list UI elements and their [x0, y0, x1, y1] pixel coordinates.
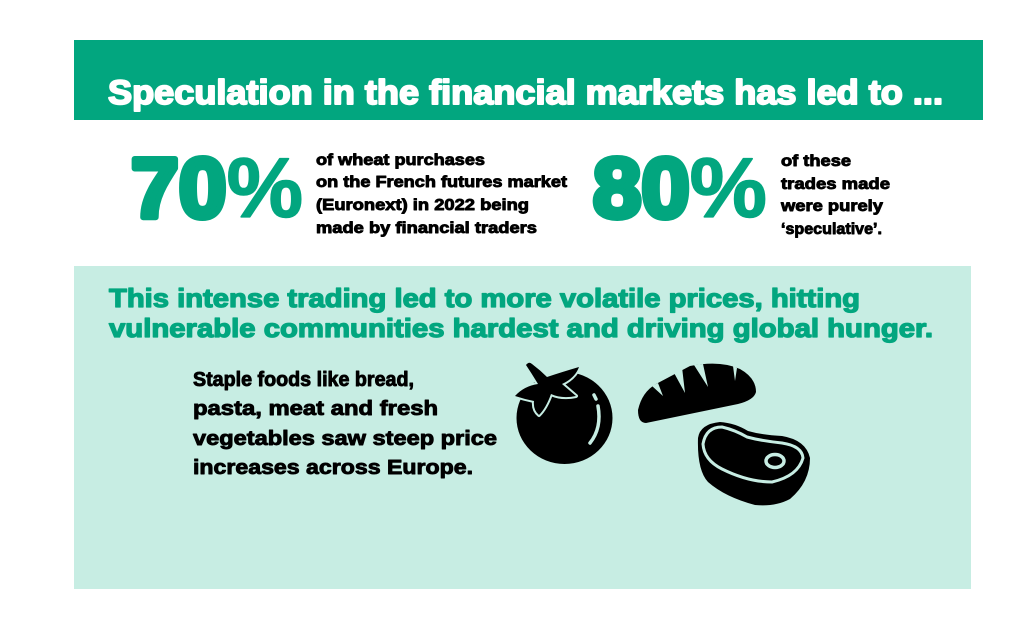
text: speculative trades description [780, 153, 890, 238]
subheading: vulnerable communities hardest and driving global hunger. [109, 313, 933, 343]
number: 80%: 80% [593, 141, 767, 235]
number: 70%: 70% [131, 141, 303, 235]
text: staple foods [193, 369, 497, 479]
text: staple foods: Staple foods like bread, [193, 369, 414, 391]
text: speculative trades description: ‘speculative’. [781, 221, 882, 238]
icon: tomato [515, 363, 612, 464]
text: speculative trades description: trades made [781, 176, 890, 193]
text: staple foods: vegetables saw steep price [193, 428, 497, 450]
panel: header band [74, 40, 983, 120]
text: wheat purchases description: of wheat purchases [316, 152, 485, 169]
text: wheat purchases description: made by financial traders [316, 220, 537, 237]
stat: 80 percent [593, 141, 890, 238]
text: wheat purchases description [316, 152, 568, 237]
text: staple foods: increases across Europe. [193, 457, 473, 479]
text: wheat purchases description: (Euronext) in 2022 being [316, 197, 529, 214]
stat: 70 percent [131, 141, 568, 237]
text: staple foods: pasta, meat and fresh [193, 398, 438, 420]
text: wheat purchases description: on the French futures market [316, 174, 568, 191]
text: speculative trades description: were purely [780, 198, 883, 215]
icon: steak [698, 422, 810, 505]
subheading [109, 283, 933, 343]
title: Speculation in the financial markets has led to ... [108, 74, 943, 112]
icon: bread [638, 364, 756, 423]
subheading: This intense trading led to more volatile prices, hitting [109, 283, 860, 313]
panel: volatile prices [74, 266, 971, 589]
text: speculative trades description: of these [781, 153, 851, 170]
